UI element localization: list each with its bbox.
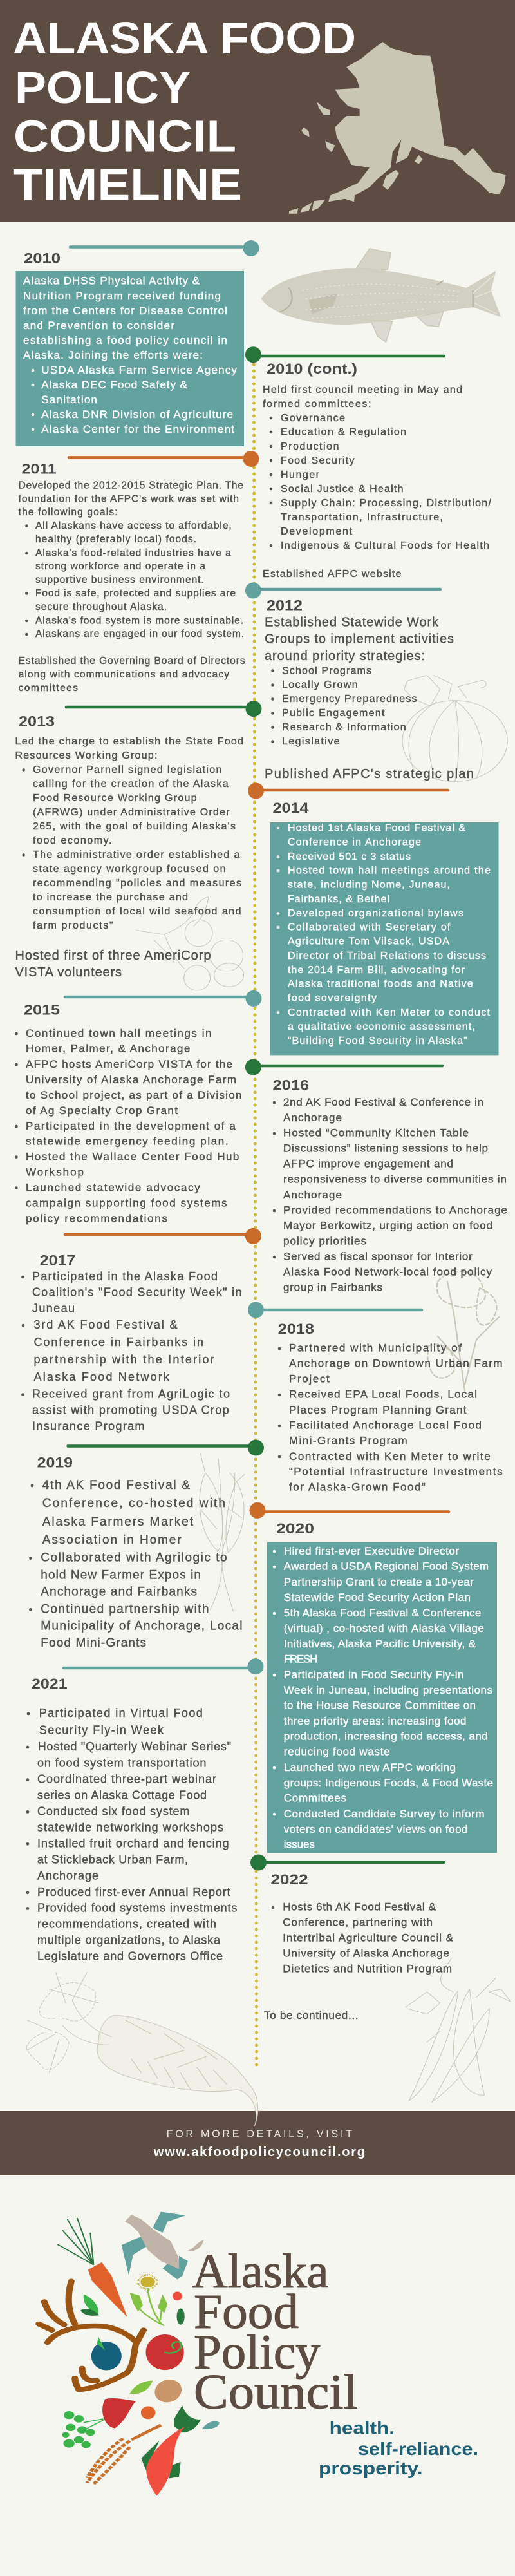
teal callout 2020: production, increasing food access, and bbox=[284, 1730, 488, 1743]
text block 2017: Coalition's "Food Security Week" in bbox=[32, 1286, 242, 1299]
teal callout 2020: FRESH bbox=[284, 1653, 317, 1665]
text block 2022: Dietetics and Nutrition Program bbox=[283, 1963, 452, 1975]
text block 2019: Conference, co-hosted with bbox=[42, 1497, 225, 1510]
year heading 2014: 2014 bbox=[273, 800, 309, 816]
text block 2017: assist with promoting USDA Crop bbox=[32, 1404, 229, 1417]
teal callout 2020 bbox=[267, 1542, 497, 1853]
teal callout 2020: 5th Alaska Food Festival & Conference bbox=[284, 1607, 481, 1619]
year heading 2010 cont: 2010 (cont.) bbox=[267, 361, 357, 377]
teal callout 2020: Committees bbox=[284, 1792, 346, 1804]
text block 2021: recommendations, created with bbox=[37, 1918, 216, 1931]
text block 2019: Association in Homer bbox=[42, 1533, 182, 1547]
teal callout 2010: Alaska DHSS Physical Activity & bbox=[23, 274, 200, 287]
timeline marker 2013 bbox=[66, 701, 261, 717]
list 2012: Emergency Preparedness bbox=[282, 694, 417, 705]
timeline marker 2015 bbox=[65, 990, 261, 1007]
teal callout 2014: food sovereignty bbox=[288, 993, 377, 1004]
text block 2010 cont: Supply Chain: Processing, Distribution/ bbox=[281, 498, 492, 509]
list 2012: Locally Grown bbox=[282, 679, 358, 690]
text block 2021: Coordinated three-part webinar bbox=[37, 1773, 216, 1786]
text block 2021: at Stickleback Urban Farm, bbox=[37, 1853, 188, 1866]
logo tagline: health. bbox=[330, 2418, 395, 2438]
list 2012: Research & Information bbox=[282, 722, 406, 733]
text block 2010 cont: Food Security bbox=[281, 455, 354, 466]
text block 2021: series on Alaska Cottage Food bbox=[37, 1789, 207, 1802]
text block 2017: Received grant from AgriLogic to bbox=[32, 1387, 230, 1400]
teal callout 2014: Hosted 1st Alaska Food Festival & bbox=[288, 823, 465, 834]
teal callout 2020: groups: Indigenous Foods, & Food Waste bbox=[284, 1777, 493, 1789]
text block 2017 bbox=[32, 1270, 242, 1432]
text block 2016: Discussions” listening sessions to help bbox=[283, 1142, 488, 1154]
teal callout 2014: Collaborated with Secretary of bbox=[288, 922, 451, 933]
text block 2015: policy recommendations bbox=[26, 1213, 167, 1225]
footer url: www.akfoodpolicycouncil.org bbox=[153, 2145, 365, 2159]
teal callout 2020: Week in Juneau, including presentations bbox=[284, 1684, 492, 1696]
panel: 2015 bbox=[15, 990, 261, 1225]
teal callout 2020: Conducted Candidate Survey to inform bbox=[284, 1808, 484, 1820]
footer band bbox=[0, 2111, 515, 2175]
teal callout 2020: Initiatives, Alaska Pacific University, & bbox=[284, 1638, 476, 1650]
teal callout 2020: Hired first-ever Executive Director bbox=[284, 1545, 459, 1557]
text block 2019: Continued partnership with bbox=[41, 1602, 209, 1616]
teal callout 2014: Director of Tribal Relations to discuss bbox=[288, 951, 486, 961]
text block 2010 cont: Indigenous & Cultural Foods for Health bbox=[281, 540, 489, 551]
text block 2017: Juneau bbox=[32, 1302, 75, 1314]
text block 2018: Contracted with Ken Meter to write bbox=[289, 1450, 491, 1463]
note: VISTA volunteers bbox=[15, 949, 211, 980]
panel: 2011 bbox=[19, 451, 259, 694]
header banner bbox=[0, 0, 515, 222]
text block 2015: Homer, Palmer, & Anchorage bbox=[26, 1043, 190, 1055]
logo tagline bbox=[319, 2418, 478, 2478]
year heading 2020: 2020 bbox=[276, 1520, 314, 1537]
text block 2013 bbox=[15, 736, 243, 931]
teal callout 2014: state, including Nome, Juneau, bbox=[288, 880, 450, 891]
text block 2011: secure throughout Alaska. bbox=[35, 601, 167, 612]
panel: 2016 bbox=[245, 1059, 507, 1293]
text block 2013: (AFRWG) under Administrative Order bbox=[33, 807, 230, 818]
text block 2019 bbox=[41, 1479, 243, 1650]
text block 2011: All Alaskans have access to affordable, bbox=[35, 520, 232, 531]
panel: 2014 bbox=[248, 783, 498, 1055]
text block 2015: Launched statewide advocacy bbox=[26, 1182, 200, 1194]
text block 2021: Hosted "Quarterly Webinar Series" bbox=[38, 1740, 231, 1753]
text block 2011: supportive business environment. bbox=[35, 574, 204, 585]
year heading 2010: 2010 bbox=[24, 250, 61, 267]
panel: 2022 bbox=[250, 1855, 454, 2022]
text block 2016: Served as fiscal sponsor for Interior bbox=[283, 1251, 473, 1263]
text block 2021: Legislature and Governors Office bbox=[37, 1950, 223, 1963]
footer caption: FOR MORE DETAILS, VISIT bbox=[167, 2128, 352, 2139]
text block 2021: Anchorage bbox=[37, 1870, 98, 1882]
text block 2011: along with communications and advocacy bbox=[19, 669, 229, 680]
logo mark: food and wildlife shapes bbox=[39, 2211, 220, 2496]
teal callout 2014: Contracted with Ken Meter to conduct bbox=[288, 1007, 491, 1018]
teal callout 2020: Launched two new AFPC working bbox=[284, 1761, 456, 1774]
text block 2012: Groups to implement activities bbox=[265, 632, 454, 647]
timeline marker 2016 bbox=[245, 1059, 442, 1075]
text block 2016: responsiveness to diverse communities in bbox=[283, 1173, 507, 1186]
text block 2013: recommending "policies and measures bbox=[33, 878, 241, 889]
teal callout 2020: Awarded a USDA Regional Food System bbox=[284, 1560, 489, 1573]
text block 2013: consumption of local wild seafood and bbox=[33, 906, 241, 917]
panel: 2013 bbox=[15, 701, 261, 980]
text block 2016: policy priorities bbox=[283, 1235, 366, 1247]
year heading 2019: 2019 bbox=[37, 1454, 73, 1471]
text block 2022 bbox=[264, 1901, 454, 2022]
panel: 2012 bbox=[245, 582, 474, 781]
text block 2015: Workshop bbox=[26, 1166, 84, 1179]
logo bbox=[39, 2211, 478, 2496]
text block 2013: to increase the purchase and bbox=[33, 892, 188, 903]
icon: Alaska map bbox=[289, 42, 506, 214]
teal callout 2020: three priority areas: increasing food bbox=[284, 1715, 466, 1727]
list 2012: Legislative bbox=[282, 736, 340, 747]
panel: 2021 bbox=[26, 1658, 263, 1963]
text block 2021: statewide networking workshops bbox=[37, 1821, 223, 1834]
year heading 2011: 2011 bbox=[22, 461, 57, 477]
logo wordmark: Council bbox=[194, 2365, 358, 2419]
text block 2010 cont: Established AFPC website bbox=[263, 569, 402, 580]
teal callout 2014: Developed organizational bylaws bbox=[288, 908, 464, 919]
text block 2012 bbox=[265, 616, 474, 781]
panel: 2020 bbox=[250, 1502, 497, 1853]
note: VISTA volunteers: VISTA volunteers bbox=[15, 965, 122, 980]
teal callout 2014: Received 501 c 3 status bbox=[288, 851, 411, 862]
panel: 2010 bbox=[15, 240, 259, 446]
text block 2011: Alaska's food system is more sustainable. bbox=[35, 615, 243, 626]
timeline marker 2011 bbox=[69, 451, 259, 467]
text block 2017: Conference in Fairbanks in bbox=[33, 1336, 203, 1349]
text block 2018: Places Program Planning Grant bbox=[289, 1404, 467, 1416]
text block 2022: Hosts 6th AK Food Festival & bbox=[283, 1901, 436, 1913]
text block 2022: University of Alaska Anchorage bbox=[283, 1947, 449, 1960]
timeline marker 2017 bbox=[65, 1228, 261, 1244]
text block 2016: Anchorage bbox=[283, 1112, 342, 1124]
text block 2015: Hosted the Wallace Center Food Hub bbox=[26, 1150, 239, 1163]
teal callout 2020: issues bbox=[284, 1839, 315, 1851]
teal callout 2014: the 2014 Farm Bill, advocating for bbox=[288, 965, 465, 976]
text block 2018: Partnered with Municipality of bbox=[289, 1342, 462, 1354]
title: ALASKA FOOD bbox=[13, 13, 356, 63]
text block 2015: Participated in the development of a bbox=[26, 1120, 236, 1132]
text block 2011: Developed the 2012-2015 Strategic Plan. The bbox=[19, 480, 243, 491]
text block 2011: healthy (preferably local) foods. bbox=[35, 534, 196, 545]
teal callout 2010: Sanitation bbox=[41, 393, 97, 406]
text block 2016: 2nd AK Food Festival & Conference in bbox=[283, 1096, 483, 1108]
logo wordmark: Alaska bbox=[192, 2244, 328, 2298]
illustration: wheat bbox=[200, 1454, 245, 1611]
text block 2019: Anchorage and Fairbanks bbox=[41, 1586, 197, 1599]
illustration: cilantro bbox=[427, 1271, 499, 1391]
year heading 2016: 2016 bbox=[273, 1077, 309, 1094]
text block 2013: Led the charge to establish the State Food bbox=[15, 736, 243, 747]
text block 2019: Food Mini-Grants bbox=[41, 1636, 146, 1650]
text block 2016: Alaska Food Network-local food policy bbox=[283, 1266, 492, 1278]
text block 2021: Participated in Virtual Food bbox=[39, 1707, 203, 1719]
text block 2018: Received EPA Local Foods, Local bbox=[289, 1388, 477, 1400]
text block 2016 bbox=[283, 1096, 507, 1293]
logo wordmark: Policy bbox=[194, 2325, 320, 2379]
text block 2013: food economy. bbox=[33, 835, 112, 846]
year heading 2012: 2012 bbox=[267, 598, 303, 614]
text block 2010 cont: Held first council meeting in May and bbox=[263, 384, 462, 395]
text block 2011: strong workforce and operate in a bbox=[35, 561, 205, 572]
timeline marker 2021 bbox=[64, 1658, 264, 1674]
text block 2018: Anchorage on Downtown Urban Farm bbox=[289, 1357, 503, 1369]
text block 2018: Mini-Grants Program bbox=[289, 1435, 407, 1446]
teal callout 2014 bbox=[270, 822, 498, 1055]
panel: 2018 bbox=[248, 1302, 503, 1493]
teal callout 2010: Alaska DEC Food Safety & bbox=[41, 379, 188, 391]
text block 2012: around priority strategies: bbox=[265, 649, 425, 663]
text block 2013: 265, with the goal of building Alaska's bbox=[33, 821, 236, 832]
list 2012: Public Engagement bbox=[282, 708, 385, 719]
text block 2010 cont: Social Justice & Health bbox=[281, 484, 403, 495]
title bbox=[13, 13, 356, 210]
teal callout 2010: Alaska DNR Division of Agriculture bbox=[41, 408, 233, 421]
timeline marker 2010 cont bbox=[245, 346, 444, 363]
text block 2017: Insurance Program bbox=[32, 1419, 144, 1432]
text block 2013: Food Resource Working Group bbox=[33, 793, 197, 804]
panel: 2017 bbox=[21, 1228, 261, 1432]
text block 2011: committees bbox=[19, 683, 78, 694]
text block 2021: Installed fruit orchard and fencing bbox=[37, 1837, 229, 1850]
year heading 2018: 2018 bbox=[278, 1321, 314, 1337]
text block 2011: Food is safe, protected and supplies are bbox=[35, 588, 236, 599]
logo tagline: self-reliance. bbox=[358, 2439, 478, 2459]
illustration: radish bbox=[26, 1973, 258, 2126]
text block 2022: Conference, partnering with bbox=[283, 1917, 433, 1929]
text block 2018: Project bbox=[289, 1373, 330, 1385]
text block 2016: group in Fairbanks bbox=[283, 1281, 382, 1293]
teal callout 2020: to the House Resource Committee on bbox=[284, 1700, 476, 1712]
text block 2016: Anchorage bbox=[283, 1189, 342, 1201]
teal callout 2010: establishing a food policy council in bbox=[23, 334, 227, 346]
teal callout 2014: Agriculture Tom Vilsack, USDA bbox=[288, 936, 449, 947]
text block 2018: Facilitated Anchorage Local Food bbox=[289, 1419, 482, 1432]
text block 2022: Intertribal Agriculture Council & bbox=[283, 1931, 454, 1944]
text block 2010 cont: formed committees: bbox=[263, 399, 371, 410]
text block 2012: Established Statewide Work bbox=[265, 616, 439, 630]
text block 2015: campaign supporting food systems bbox=[26, 1197, 227, 1209]
teal callout 2014: Alaska traditional foods and Native bbox=[288, 979, 473, 990]
title: POLICY bbox=[15, 62, 191, 113]
text block 2017: 3rd AK Food Festival & bbox=[33, 1318, 178, 1331]
text block 2019: Alaska Farmers Market bbox=[42, 1515, 194, 1529]
title: COUNCIL bbox=[14, 111, 236, 161]
text block 2021 bbox=[37, 1707, 237, 1963]
text block 2015: of Ag Specialty Crop Grant bbox=[26, 1104, 178, 1117]
text block 2019: 4th AK Food Festival & bbox=[42, 1479, 190, 1492]
text block 2013: The administrative order established a bbox=[33, 849, 239, 860]
logo wordmark: Food bbox=[194, 2285, 299, 2339]
text block 2010 cont: Production bbox=[281, 441, 339, 452]
year heading 2013: 2013 bbox=[19, 714, 55, 729]
text block 2011: the following goals: bbox=[19, 507, 118, 518]
teal callout 2020: Statewide Food Security Action Plan bbox=[284, 1591, 471, 1604]
text block 2018 bbox=[289, 1342, 503, 1493]
text block 2021: on food system transportation bbox=[37, 1756, 206, 1769]
text block 2011 bbox=[19, 480, 245, 694]
teal callout 2010: Nutrition Program received funding bbox=[23, 290, 221, 302]
text block 2010 cont: Hunger bbox=[281, 469, 320, 480]
teal callout 2010 bbox=[15, 271, 244, 446]
teal callout 2014: “Building Food Security in Alaska” bbox=[288, 1036, 467, 1046]
note: VISTA volunteers: Hosted first of three AmeriCorp bbox=[15, 949, 211, 963]
text block 2021: Provided food systems investments bbox=[37, 1901, 237, 1914]
text block 2022: To be continued... bbox=[264, 2009, 359, 2022]
illustration: berries bbox=[136, 897, 244, 990]
text block 2021: Produced first-ever Annual Report bbox=[37, 1886, 230, 1899]
teal callout 2014: a qualitative economic assessment, bbox=[288, 1021, 475, 1032]
text block 2016: Provided recommendations to Anchorage bbox=[283, 1204, 507, 1217]
text block 2010 cont: Transportation, Infrastructure, bbox=[281, 512, 443, 523]
teal callout 2014: Conference in Anchorage bbox=[288, 837, 421, 848]
text block 2021: Conducted six food system bbox=[37, 1804, 189, 1817]
text block 2013: Resources Working Group: bbox=[15, 750, 157, 761]
teal callout 2010: USDA Alaska Farm Service Agency bbox=[41, 364, 238, 376]
text block 2018: for Alaska-Grown Food” bbox=[289, 1481, 426, 1493]
teal callout 2014: Hosted town hall meetings around the bbox=[288, 866, 491, 876]
text block 2016: Hosted “Community Kitchen Table bbox=[283, 1127, 469, 1139]
teal callout 2020: Participated in Food Security Fly-in bbox=[284, 1669, 464, 1681]
teal callout 2020: Partnership Grant to create a 10-year bbox=[284, 1576, 474, 1588]
text block 2016: AFPC improve engagement and bbox=[283, 1158, 453, 1170]
text block 2015 bbox=[26, 1027, 242, 1225]
teal callout 2020: voters on candidates' views on food bbox=[284, 1823, 467, 1835]
teal callout 2020: (virtual) , co-hosted with Alaska Village bbox=[284, 1622, 484, 1634]
text block 2017: Participated in the Alaska Food bbox=[32, 1270, 218, 1283]
text block 2011: Alaska's food-related industries have a bbox=[35, 547, 231, 558]
teal callout 2010: from the Centers for Disease Control bbox=[23, 305, 227, 317]
list 2012: School Programs bbox=[282, 665, 371, 676]
timeline marker 2018 bbox=[248, 1302, 422, 1318]
panel: 2019 bbox=[29, 1440, 264, 1650]
text block 2013: farm products" bbox=[33, 920, 113, 931]
text block 2019: hold New Farmer Expos in bbox=[41, 1569, 201, 1582]
timeline: dotted spine bbox=[254, 365, 257, 2067]
list 2012 bbox=[282, 665, 417, 747]
text block 2011: Established the Governing Board of Directors bbox=[19, 656, 245, 667]
text block 2016: Mayor Berkowitz, urging action on food bbox=[283, 1220, 492, 1232]
text block 2010 cont: Education & Regulation bbox=[281, 427, 406, 438]
teal callout 2014: Fairbanks, & Bethel bbox=[288, 894, 389, 905]
text block 2017: partnership with the Interior bbox=[33, 1353, 214, 1366]
year heading 2021: 2021 bbox=[32, 1676, 68, 1692]
text block 2015: to School project, as part of a Division bbox=[26, 1089, 242, 1101]
timeline marker 2022 bbox=[250, 1855, 444, 1870]
year heading 2022: 2022 bbox=[270, 1871, 308, 1888]
timeline marker 2010 bbox=[70, 240, 259, 256]
text block 2019: Collaborated with Agrilogic to bbox=[41, 1551, 227, 1565]
text block 2017: Alaska Food Network bbox=[33, 1370, 170, 1383]
teal callout 2010: Alaska. Joining the efforts were: bbox=[23, 349, 203, 361]
text block 2013: state agency workgroup focused on bbox=[33, 864, 225, 875]
text block 2019: Municipality of Anchorage, Local bbox=[41, 1619, 243, 1633]
text block 2011: foundation for the AFPC's work was set with bbox=[19, 493, 239, 504]
text block 2018: “Potential Infrastructure Investments bbox=[289, 1466, 503, 1478]
illustration: salmon bbox=[261, 249, 501, 342]
timeline marker 2014 bbox=[248, 783, 448, 799]
text block 2021: multiple organizations, to Alaska bbox=[37, 1933, 221, 1946]
text block 2012: Published AFPC's strategic plan bbox=[265, 767, 474, 781]
text block 2010 cont: Development bbox=[281, 526, 353, 537]
illustration: peas bbox=[406, 1958, 510, 2102]
text block 2015: statewide emergency feeding plan. bbox=[26, 1135, 229, 1148]
text block 2021: Security Fly-in Week bbox=[39, 1724, 164, 1737]
text block 2010 cont: Governance bbox=[281, 413, 345, 424]
logo tagline: prosperity. bbox=[319, 2458, 423, 2478]
teal callout 2010: and Prevention to consider bbox=[23, 319, 174, 332]
text block 2010 cont bbox=[263, 384, 492, 580]
text block 2013: Governor Parnell signed legislation bbox=[33, 764, 221, 775]
teal callout 2010: Alaska Center for the Environment bbox=[41, 423, 234, 435]
teal callout 2020: reducing food waste bbox=[284, 1746, 390, 1758]
year heading 2015: 2015 bbox=[24, 1002, 60, 1018]
text block 2011: Alaskans are engaged in our food system. bbox=[35, 629, 244, 639]
text block 2013: calling for the creation of the Alaska bbox=[33, 779, 229, 790]
illustration: pumpkin bbox=[402, 676, 507, 781]
panel: 2010 continued bbox=[245, 346, 492, 580]
timeline marker 2019 bbox=[68, 1440, 264, 1455]
text block 2015: Continued town hall meetings in bbox=[26, 1027, 212, 1039]
text block 2015: AFPC hosts AmeriCorp VISTA for the bbox=[26, 1058, 232, 1070]
title: TIMELINE bbox=[13, 160, 242, 210]
text block 2015: University of Alaska Anchorage Farm bbox=[26, 1074, 236, 1086]
year heading 2017: 2017 bbox=[40, 1252, 75, 1269]
timeline marker 2012 bbox=[245, 582, 440, 599]
logo wordmark bbox=[192, 2244, 358, 2419]
timeline marker 2020 bbox=[250, 1502, 449, 1519]
